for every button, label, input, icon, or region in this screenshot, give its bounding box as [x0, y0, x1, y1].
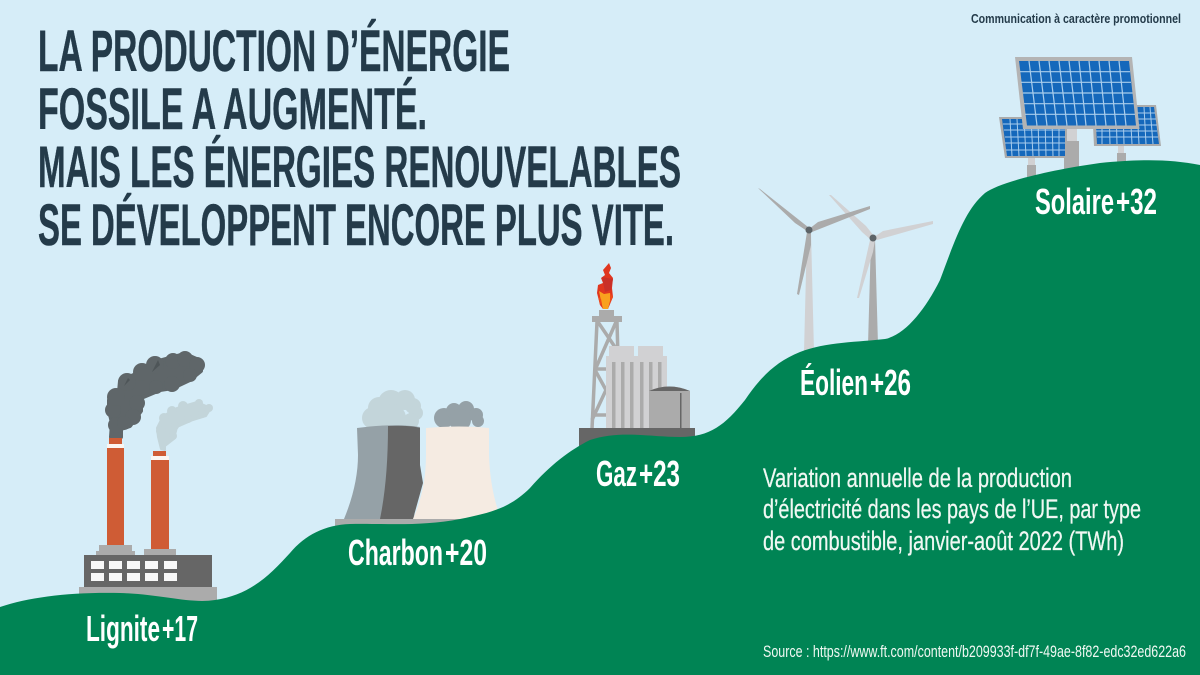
label: Solaire: Solaire [1035, 181, 1114, 222]
title: FOSSILE A AUGMENTÉ. [38, 77, 427, 142]
plant windows [91, 561, 177, 581]
title: MAIS LES ÉNERGIES RENOUVELABLES [38, 135, 681, 200]
platform [579, 428, 695, 446]
icon: solar panels [999, 57, 1161, 183]
panel posts [1028, 158, 1035, 166]
description text [763, 463, 1141, 556]
chimney 1 [109, 438, 122, 444]
label: Charbon: Charbon [348, 532, 443, 573]
icon: gas plant [579, 263, 695, 446]
tower base [335, 519, 500, 528]
side panel left [999, 117, 1067, 158]
label: Lignite: +17 [162, 608, 198, 649]
icon: cooling towers [335, 390, 501, 528]
flame [597, 263, 613, 309]
derrick [599, 310, 614, 317]
label: Éolien: Éolien [800, 362, 868, 403]
side panel right [1092, 105, 1161, 146]
main panel [1015, 57, 1140, 129]
label: Éolien: +26 [870, 362, 911, 403]
tower right [413, 426, 501, 519]
label: Gaz: Gaz [596, 453, 637, 494]
plant base [96, 545, 135, 555]
dark smoke [105, 351, 205, 437]
turbine back [829, 195, 933, 345]
label: Lignite: Lignite [86, 608, 160, 649]
label: Solaire: +32 [1116, 181, 1157, 222]
title [38, 19, 681, 258]
tanks [609, 346, 634, 358]
green hill [0, 160, 1200, 675]
icon: lignite power plant [79, 351, 217, 603]
chimney 2 [153, 451, 166, 456]
label: Charbon: +20 [445, 532, 487, 573]
light smoke [156, 399, 213, 450]
title: LA PRODUCTION D’ÉNERGIE [38, 19, 510, 84]
icon: wind turbines [758, 188, 933, 352]
storage tank [649, 386, 690, 429]
label: Gaz: +23 [639, 453, 680, 494]
tower left [344, 425, 420, 519]
turbine front [758, 188, 870, 352]
title: SE DÉVELOPPENT ENCORE PLUS VITE. [38, 193, 674, 258]
description text: Variation annuelle de la production [763, 463, 1072, 493]
grey steam [434, 401, 484, 431]
light steam [362, 390, 423, 432]
